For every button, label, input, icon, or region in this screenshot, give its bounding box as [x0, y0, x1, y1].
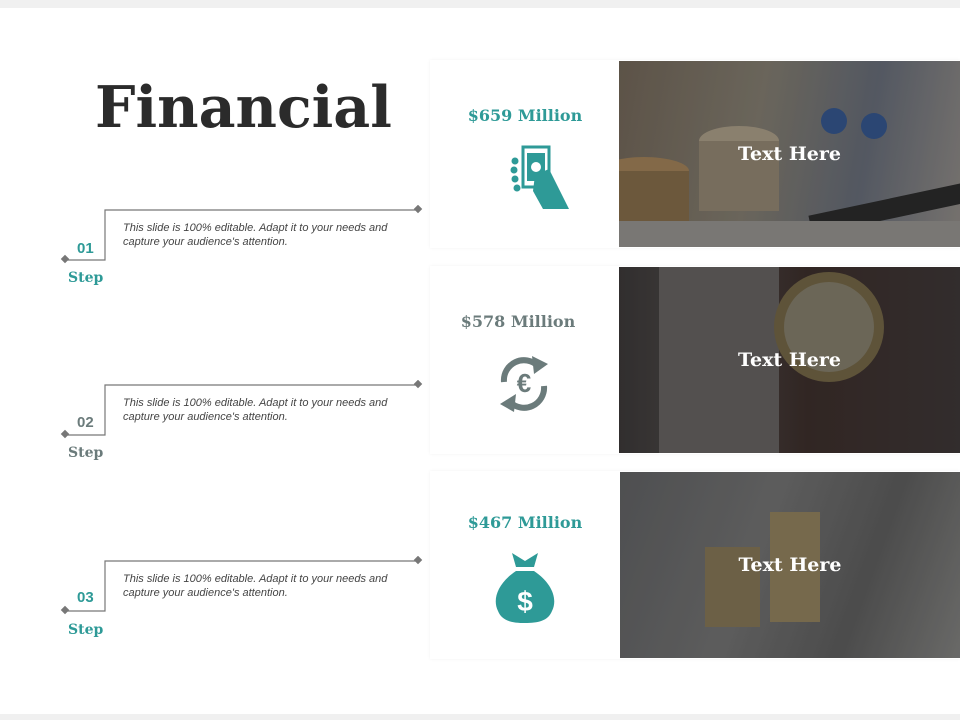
step 1: Step — [68, 270, 103, 286]
card 2: $578 Million — [461, 312, 575, 331]
icon: hand with money — [510, 146, 569, 209]
photo 1: Text Here — [738, 143, 841, 165]
icon: money bag — [496, 553, 554, 623]
step 2: 02 — [77, 414, 94, 431]
card 1: $659 Million — [468, 106, 582, 125]
icon: money bag: $ — [517, 586, 533, 617]
step 2: This slide is 100% editable. Adapt it to your needs and capture your audience's attention. — [123, 397, 387, 423]
photo 3: Text Here — [739, 554, 841, 576]
step 3: 03 — [77, 589, 94, 606]
photo 2 — [619, 267, 960, 453]
icon: euro exchange: € — [517, 368, 531, 398]
card 3: $467 Million — [468, 513, 582, 532]
step 3 — [60, 556, 422, 638]
step 2 — [60, 380, 422, 461]
step 3: This slide is 100% editable. Adapt it to your needs and capture your audience's attention. — [123, 573, 387, 599]
card 2 — [430, 266, 960, 454]
photo 2: Text Here — [738, 349, 841, 371]
card 3 — [430, 471, 960, 659]
photo 1 — [619, 61, 960, 247]
step 2: Step — [68, 445, 103, 461]
card 1 — [430, 60, 960, 248]
icon: euro exchange — [500, 356, 548, 412]
step 1: This slide is 100% editable. Adapt it to your needs and capture your audience's attention. — [123, 222, 387, 248]
step 1 — [60, 205, 422, 286]
title: Financial — [95, 74, 392, 141]
step 3: Step — [68, 622, 103, 638]
photo 3 — [620, 472, 960, 658]
step 1: 01 — [77, 240, 94, 257]
